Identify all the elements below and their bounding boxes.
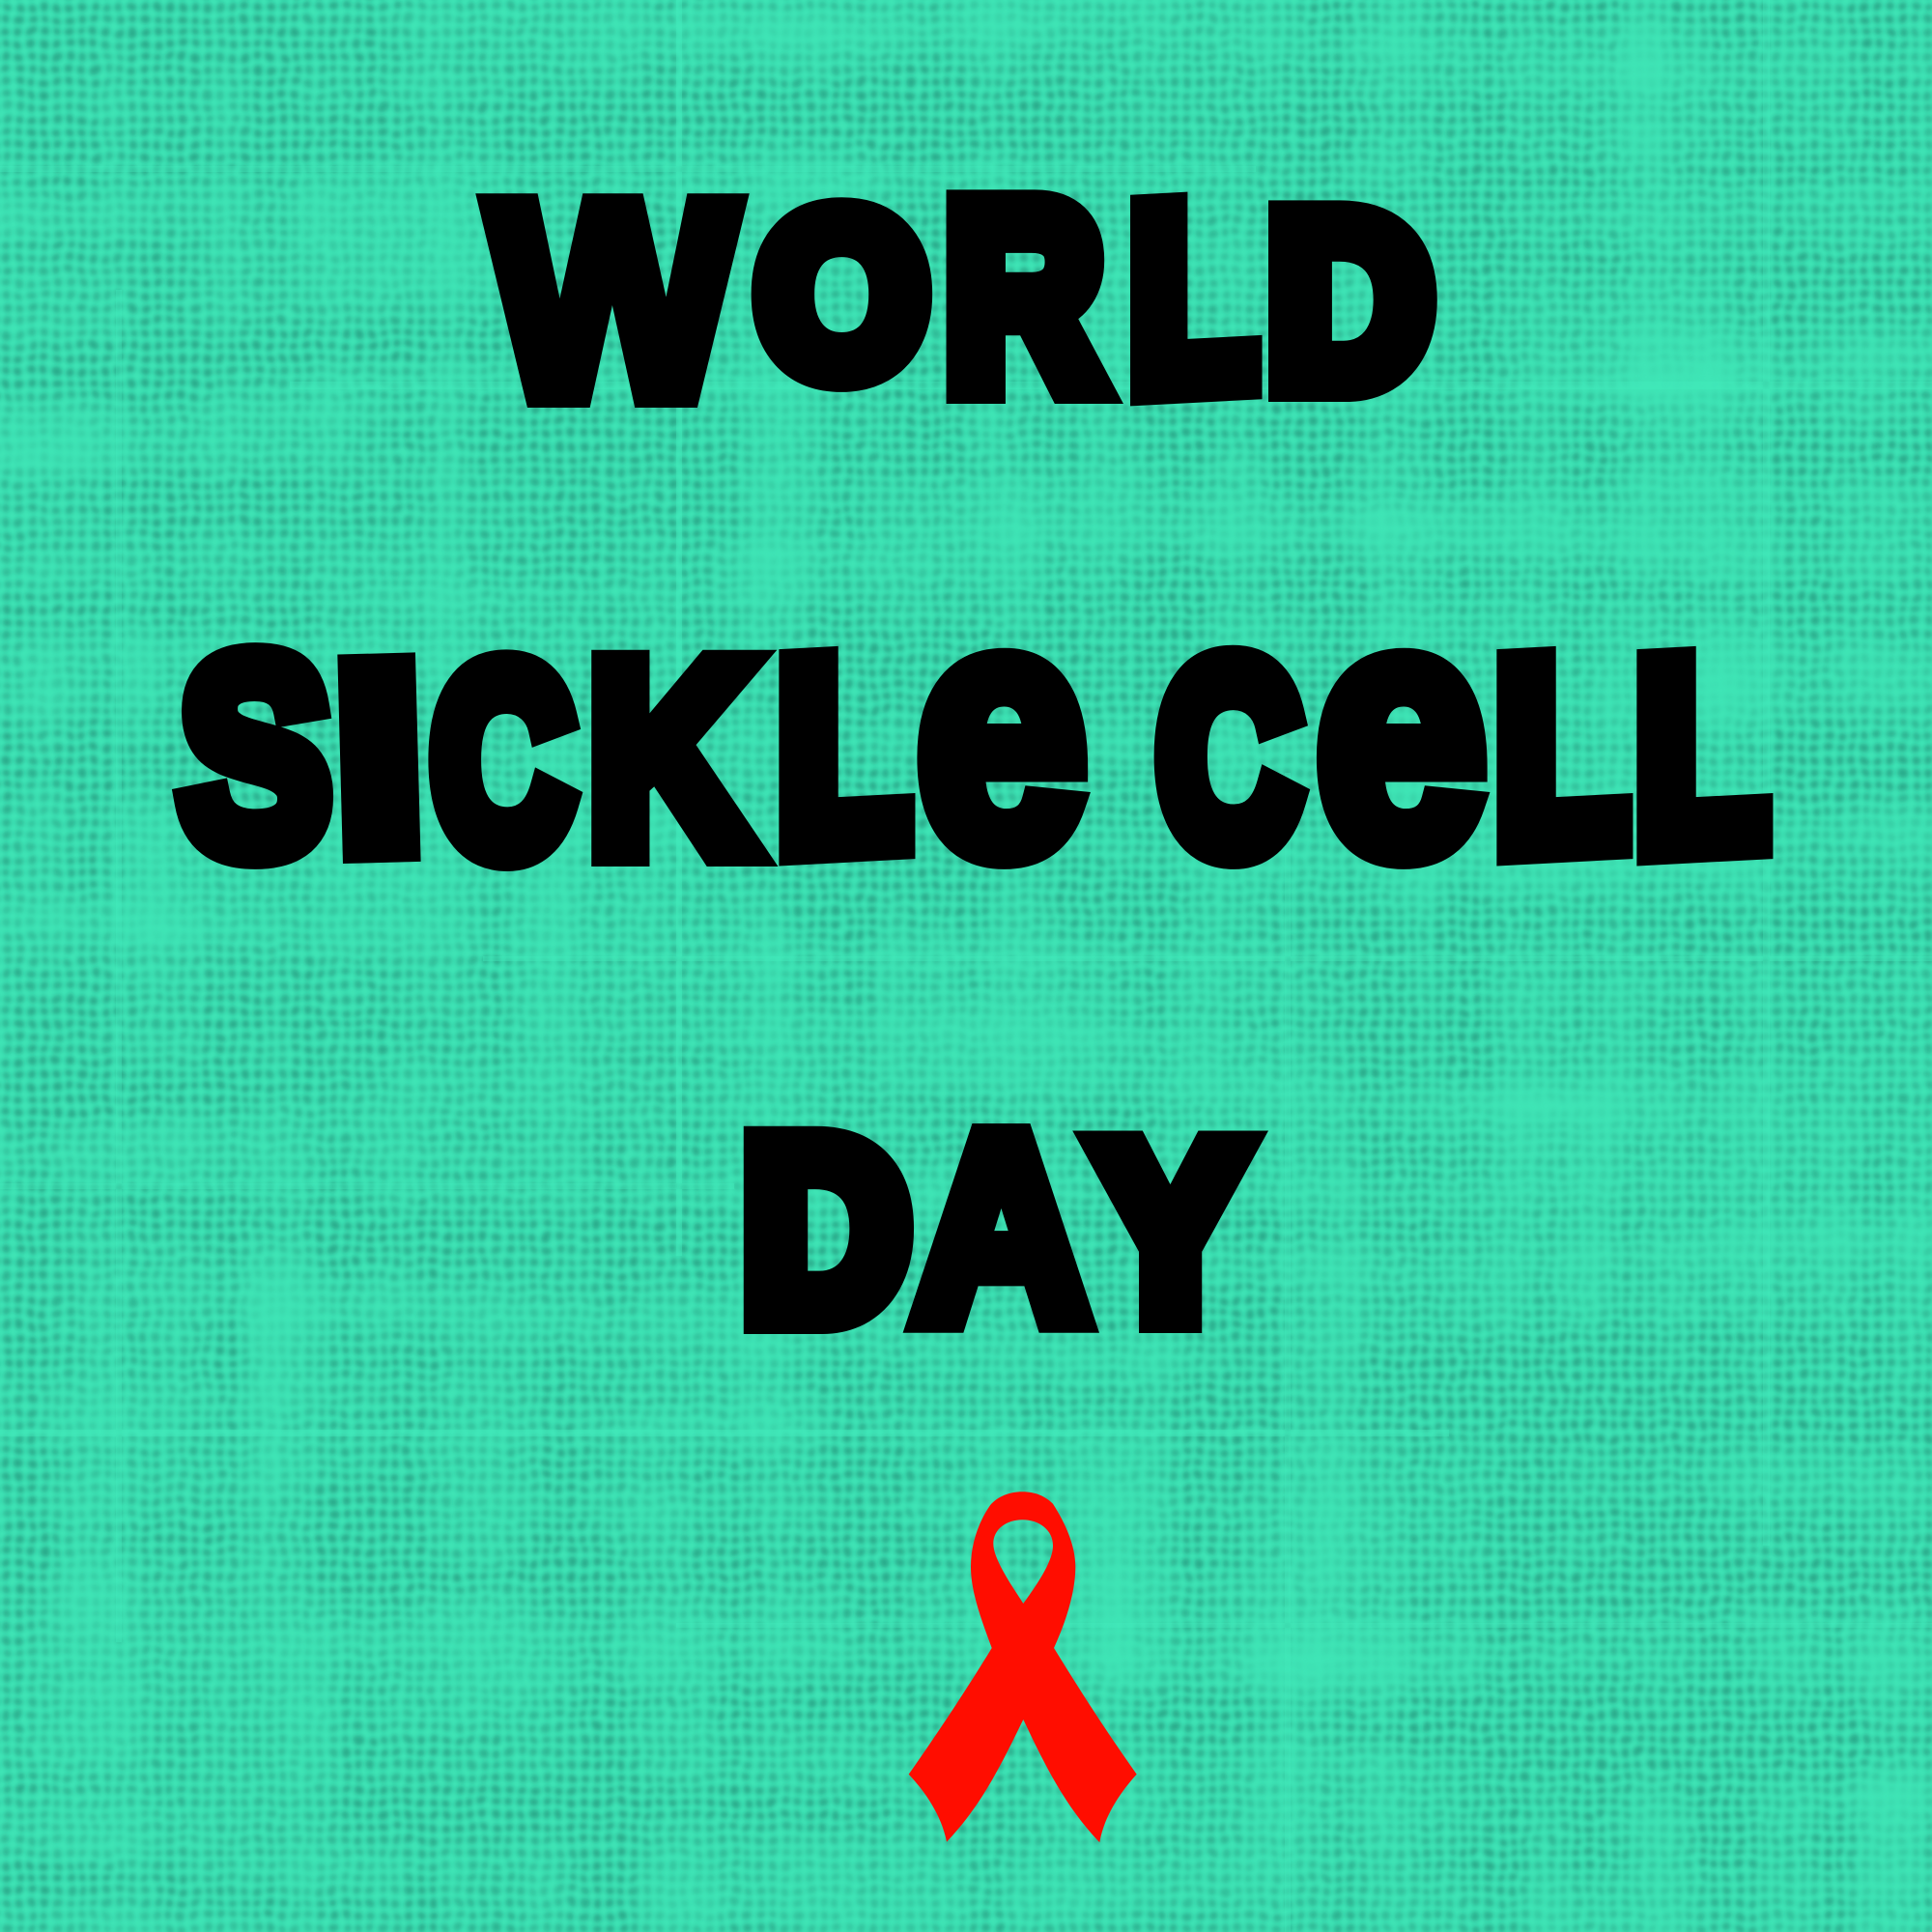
title line: DAY: A	[914, 1079, 1089, 1377]
title line: WORLD	[491, 147, 1431, 454]
title line: WORLD: O	[758, 168, 925, 421]
title line: SICKLe CeLL: S	[181, 602, 329, 911]
title line: SICKLe CeLL: L	[1497, 604, 1625, 903]
title line: SICKLe CeLL: C	[1158, 609, 1299, 907]
icon: red awareness ribbon	[909, 1492, 1137, 1842]
title line: DAY: D	[745, 1090, 907, 1371]
title line: WORLD: D	[1269, 166, 1431, 438]
title: World Sickle Cell Day	[181, 147, 1765, 1377]
title line: SICKLe CeLL: e	[918, 534, 1086, 927]
title line: WORLD: L	[1131, 152, 1254, 442]
title line: DAY: Y	[1096, 1095, 1244, 1369]
title line: SICKLe CeLL: K	[588, 608, 754, 910]
title line: WORLD: W	[491, 147, 737, 454]
title line: SICKLe CeLL: e	[1317, 534, 1486, 927]
title line: SICKLe CeLL	[181, 534, 1765, 927]
title line: SICKLe CeLL: I	[327, 604, 432, 911]
title line: DAY	[745, 1079, 1244, 1377]
title line: SICKLe CeLL: L	[1637, 604, 1765, 903]
title line: SICKLe CeLL: C	[433, 611, 572, 908]
title line: WORLD: R	[946, 150, 1102, 442]
title line: SICKLe CeLL: L	[780, 604, 907, 903]
